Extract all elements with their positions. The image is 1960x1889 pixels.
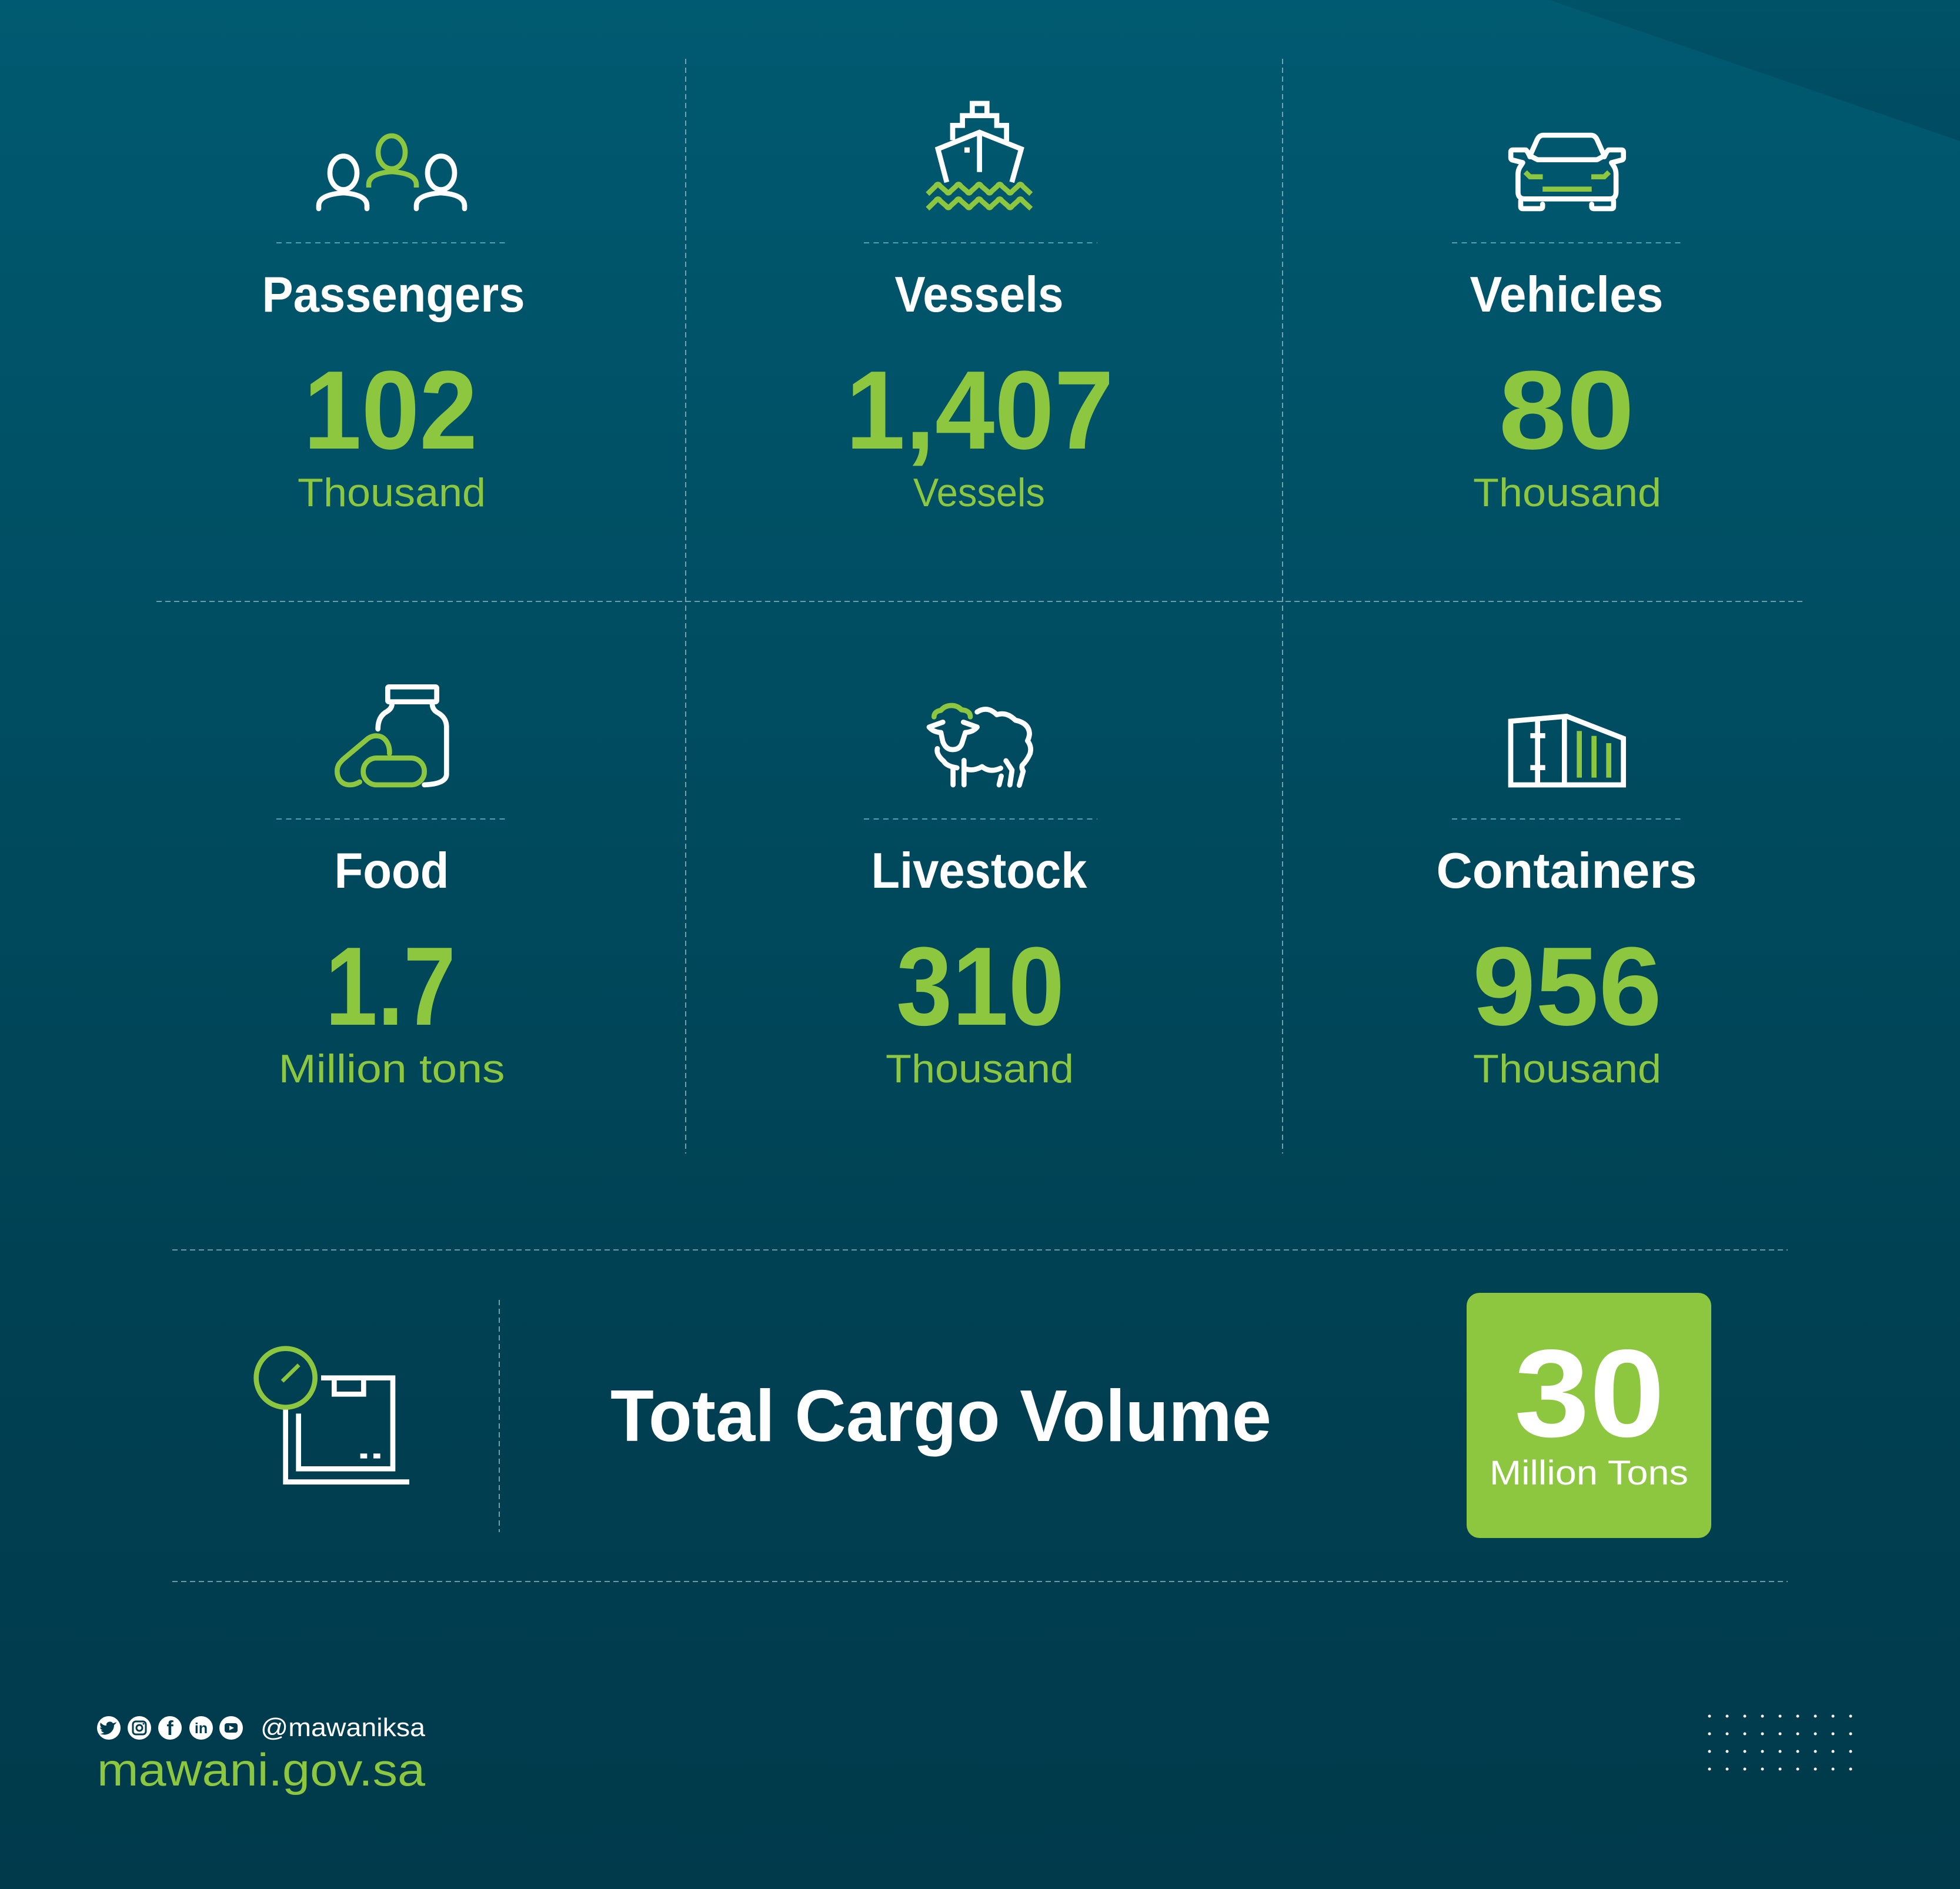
icon: container [1511, 716, 1624, 785]
number: 1.7: 1.7 [325, 924, 456, 1049]
footer: social and website [97, 1713, 426, 1796]
unit: vessels: Vessels [913, 470, 1045, 515]
unit: thousand: Thousand [886, 1047, 1074, 1091]
panel: livestock [864, 706, 1097, 1091]
unit: thousand: Thousand [1473, 470, 1661, 515]
unit: thousand: Thousand [298, 470, 486, 515]
icon: youtube [219, 1716, 243, 1740]
panel: total cargo volume [256, 1293, 1711, 1538]
number: 956: 956 [1472, 924, 1662, 1049]
panel: food [276, 687, 509, 1091]
icon: linkedin: in [195, 1720, 208, 1737]
heading: vessels: Vessels [895, 267, 1063, 323]
panel: containers [1436, 716, 1697, 1091]
callout number: 30 [1514, 1323, 1665, 1463]
icon: facebook [158, 1716, 182, 1740]
number: 80: 80 [1498, 348, 1635, 473]
heading: containers: Containers [1436, 843, 1697, 899]
icon: sheep [929, 706, 1031, 785]
heading: food: Food [334, 843, 449, 899]
heading: livestock: Livestock [872, 843, 1087, 899]
background corner shape [1550, 0, 1960, 141]
icon: car [1511, 135, 1624, 209]
number: 102: 102 [303, 348, 478, 473]
icon: ship [927, 103, 1031, 209]
unit: million tons: Million tons [279, 1047, 505, 1091]
website: mawani.gov.sa [97, 1744, 426, 1796]
callout: 30 million tons [1467, 1293, 1711, 1538]
decorative dot grid [1708, 1714, 1852, 1771]
panel: vessels [846, 103, 1114, 515]
icon: facebook: f [166, 1717, 173, 1740]
number: 310: 310 [896, 924, 1064, 1049]
heading: total cargo volume: Total Cargo Volume [610, 1376, 1271, 1457]
icon: linkedin [189, 1716, 213, 1740]
icon: instagram [128, 1716, 151, 1740]
icon: passengers [319, 136, 465, 209]
icon: cargo scale [256, 1349, 409, 1482]
icon: twitter [97, 1716, 121, 1740]
panel: vehicles [1452, 135, 1685, 515]
number: 1,407: 1,407 [846, 348, 1114, 473]
callout unit: Million Tons [1490, 1454, 1688, 1492]
social handle: @mawaniksa [261, 1713, 426, 1742]
heading: passengers: Passengers [262, 267, 525, 323]
heading: vehicles: Vehicles [1470, 267, 1663, 323]
panel: passengers [262, 136, 525, 515]
unit: thousand: Thousand [1473, 1047, 1661, 1091]
icon: food jar and pills [337, 687, 446, 785]
